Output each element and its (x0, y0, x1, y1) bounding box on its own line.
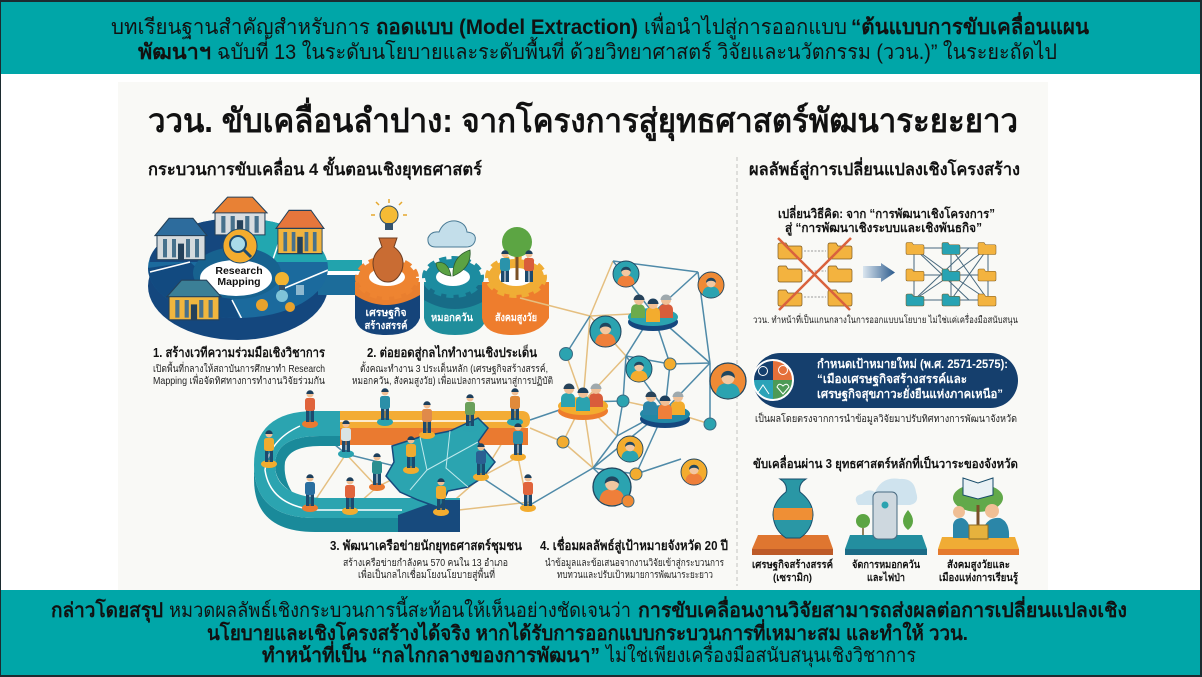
small network dots (557, 348, 716, 507)
building top (213, 197, 267, 235)
strategy: smog and wildfire (845, 479, 927, 584)
crossed-out separate folders (778, 238, 852, 310)
bottom banner: นโยบายและเชิงโครงสร้างได้จริง หากได้รับการออกแบบกระบวนการที่เหมาะสม และทำให้ ววน. (207, 618, 968, 645)
icon: elders reading under tree (938, 478, 1019, 555)
step 4 text: 4. เชื่อมผลลัพธ์สู่เป้าหมายจังหวัด 20 ปี (540, 536, 728, 554)
icon: vase on pedestal (752, 479, 833, 555)
icon: clay pot (373, 238, 403, 282)
mindset heading (778, 205, 995, 236)
mindset caption: ววน. ทำหน้าที่เป็นแกนกลางในการออกแบบนโยบาย ไม่ใช่แค่เครื่องมือสนับสนุน (753, 313, 1018, 326)
outcome 2: new target pill: “เมืองเศรษฐกิจสร้างสรรค์และ (817, 372, 967, 387)
building right (276, 210, 324, 254)
heading: outcomes: ผลลัพธ์สู่การเปลี่ยนแปลงเชิงโครงสร้าง (749, 157, 1020, 181)
step 3 text: สร้างเครือข่ายกำลังคน 570 คนใน 13 อำเภอ (343, 557, 508, 569)
icon: lightbulb (371, 199, 407, 230)
top banner: “ต้นแบบการขับเคลื่อนแผน (851, 11, 1090, 39)
step 4: stakeholder network (310, 261, 746, 512)
top banner: บทเรียนฐานสำคัญสำหรับการ (111, 16, 370, 39)
strategy: ageing society and learning city: เมืองแห่งการเรียนรู้ (939, 571, 1018, 585)
strategy: ageing society and learning city (938, 478, 1019, 585)
bottom banner: หมวดผลลัพธ์เชิงกระบวนการนี้สะท้อนให้เห็นอย่างชัดเจนว่า (169, 596, 631, 622)
strategy: ceramic: เศรษฐกิจสร้างสรรค์ (752, 558, 833, 571)
infographic panel background (118, 82, 1048, 590)
step 1 text: Mapping เพื่อจัดทิศทางการทำงานวิจัยร่วมกัน (153, 373, 325, 387)
bottom banner: กล่าวโดยสรุป (51, 598, 163, 623)
step 3 text (330, 538, 522, 581)
target text: กำหนดเป้าหมายใหม่ (พ.ศ. 2571-2575): (817, 356, 1008, 371)
group nodes (628, 294, 678, 331)
icon: tree and elders (516, 245, 518, 280)
target caption: เป็นผลโดยตรงจากการนำข้อมูลวิจัยมาปรับทิศทางการพัฒนาจังหวัด (755, 411, 1017, 425)
gear: ageing society: สังคมสูงวัย (495, 312, 537, 325)
step 2 text: 2. ต่อยอดสู่กลไกทำงานเชิงประเด็น (367, 343, 537, 361)
strategy: ceramic (752, 479, 833, 584)
community figures (261, 388, 536, 516)
gear: smog (424, 221, 486, 335)
building left (155, 218, 207, 260)
orange underside of bar (340, 428, 528, 445)
research mapping oval (200, 260, 272, 296)
avatar nodes (613, 261, 639, 287)
bottom banner: การขับเคลื่อนงานวิจัยสามารถส่งผลต่อการเปลี่ยนแปลงเชิง (638, 595, 1127, 622)
icon: air purifier on pedestal (845, 479, 927, 555)
strategy: smog and wildfire: และไฟป่า (867, 571, 905, 584)
white arrow lines (265, 426, 402, 510)
lightbulb and tools (256, 272, 304, 312)
gear: creative economy (355, 238, 420, 335)
arrow (863, 263, 895, 282)
mindset heading: สู่ “การพัฒนาเชิงระบบและเชิงพันธกิจ” (785, 221, 982, 236)
heading: three strategies: ขับเคลื่อนผ่าน 3 ยุทธศาสตร์หลักที่เป็นวาระของจังหวัด (753, 455, 1018, 472)
step 4 text: ทบทวนและปรับเป้าหมายการพัฒนาระยะยาว (557, 569, 713, 581)
step 1 text (153, 345, 325, 387)
gear: creative economy: เศรษฐกิจ (366, 307, 406, 319)
top banner: ถอดแบบ (Model Extraction) (376, 16, 638, 39)
icon: leaves (436, 250, 470, 276)
outcome 2: new target pill: เศรษฐกิจสุขภาวะยั่งยืนแห่งภาคเหนือ” (817, 385, 1003, 402)
teal U track inner wall (275, 436, 340, 492)
step 4 text: นำข้อมูลและข้อเสนอจากงานวิจัยเข้าสู่กระบวนการ (545, 557, 725, 569)
icon: four-part target circle (753, 360, 793, 400)
step 1: research mapping ring: Mapping (217, 276, 261, 288)
step 1 text: 1. สร้างเวทีความร่วมมือเชิงวิชาการ (153, 345, 325, 360)
network links (310, 261, 710, 512)
step 2 text (352, 343, 553, 387)
gear: smog: หมอกควัน (431, 312, 474, 324)
bottom banner (1, 590, 1200, 675)
step 2: three gears (355, 199, 549, 335)
outcome 2: new target pill (753, 353, 1018, 408)
step 3 text: เพื่อเป็นกลไกเชื่อมโยงนโยบายสู่พื้นที่ (358, 567, 495, 581)
research mapping label: Research (215, 265, 263, 277)
step 3: U-shaped pathway with map (254, 388, 536, 532)
top banner (1, 2, 1200, 74)
step 1 text: เปิดพื้นที่กลางให้สถาบันการศึกษาทำ Research (153, 361, 325, 375)
navy end cap (398, 500, 460, 532)
heading: process: กระบวนการขับเคลื่อน 4 ขั้นตอนเชิงยุทธศาสตร์ (148, 156, 483, 180)
yellow arrow band (325, 411, 530, 428)
top banner: ฉบับที่ 13 ในระดับนโยบายและระดับพื้นที่ ด้วยวิทยาศาสตร์ วิจัยและนวัตกรรม (ววน.)” ในระยะถัดไป (217, 37, 1057, 64)
infographic title: ววน. ขับเคลื่อนลำปาง: จากโครงการสู่ยุทธศาสตร์พัฒนาระยะยาว (148, 97, 1018, 142)
icon: cloud (428, 221, 475, 247)
step 2 text: ตั้งคณะทำงาน 3 ประเด็นหลัก (เศรษฐกิจสร้างสรรค์, (360, 361, 548, 375)
step 4 text (540, 536, 728, 581)
teal U track top (254, 411, 460, 518)
gear: ageing society (482, 227, 549, 335)
step 1: research mapping ring (148, 197, 362, 340)
mindset heading: เปลี่ยนวิธีคิด: จาก “การพัฒนาเชิงโครงการ” (778, 205, 995, 221)
step 3 text: 3. พัฒนาเครือข่ายนักยุทธศาสตร์ชุมชน (330, 538, 522, 554)
top banner: พัฒนาฯ (138, 41, 211, 64)
connected folders (906, 242, 996, 306)
outcome 1: mindset shift (753, 205, 1018, 326)
gear: creative economy: สร้างสรรค์ (364, 319, 408, 332)
map of Lampang (386, 418, 495, 508)
strategy: ageing society and learning city: สังคมสูงวัยและ (947, 559, 1010, 572)
strategy: ceramic: (เซรามิก) (773, 572, 812, 584)
step 2 text: หมอกควัน, สังคมสูงวัย) เพื่อแปลงการสนทนาสู่การปฏิบัติ (352, 373, 553, 387)
teal U track outer side (254, 465, 460, 532)
magnifier icon (223, 229, 257, 263)
building bottom left (167, 280, 221, 320)
bottom banner: ทำหน้าที่เป็น “กลไกกลางของการพัฒนา” (262, 640, 600, 667)
bottom banner: ไม่ใช่เพียงเครื่องมือสนับสนุนเชิงวิชาการ (604, 641, 916, 668)
strategy: smog and wildfire: จัดการหมอกควัน (852, 559, 921, 571)
top banner: เพื่อนำไปสู่การออกแบบ (644, 12, 847, 40)
